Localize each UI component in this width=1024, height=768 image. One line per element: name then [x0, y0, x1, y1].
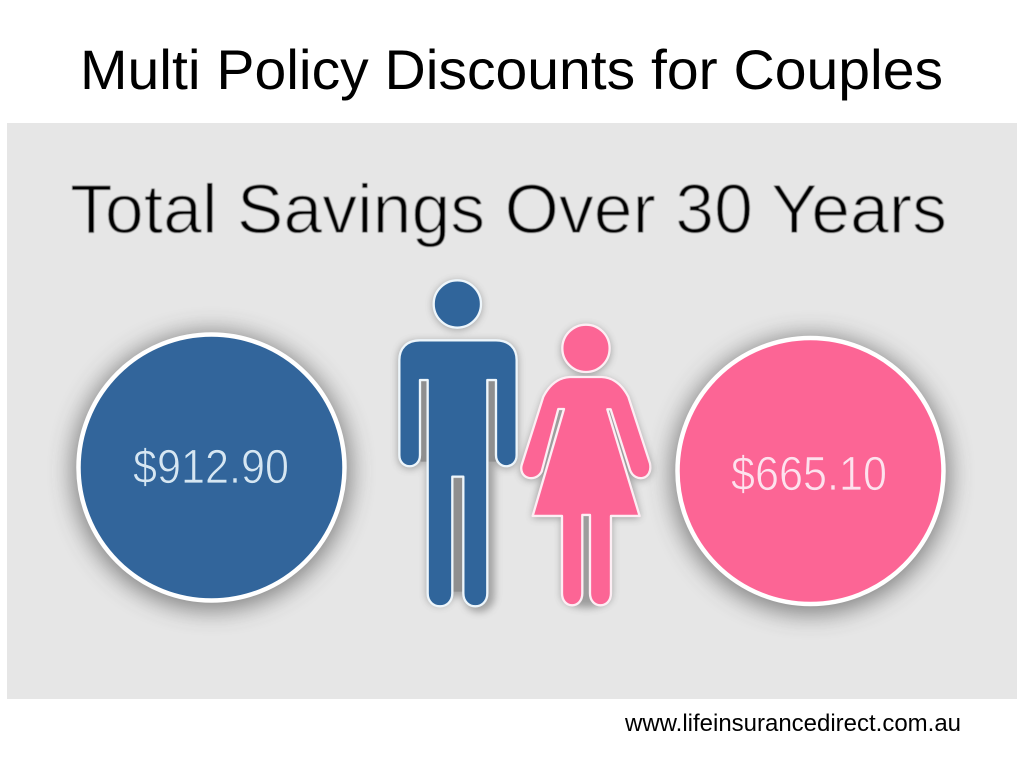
- heading: total savings: Total Savings Over 30 Years: [70, 170, 947, 248]
- shadow inside arm and leg gaps: [421, 382, 496, 592]
- icon: woman figure: [520, 325, 651, 608]
- blue savings circle: [72, 332, 350, 610]
- website footer: www.lifeinsurancedirect.com.au: [624, 710, 961, 737]
- title: Multi Policy Discounts for Couples: [80, 38, 943, 101]
- icon: man figure: [398, 280, 518, 612]
- amount: woman: $665.10: [731, 448, 887, 501]
- panel: savings graphic: [7, 123, 1017, 699]
- pink savings circle: [672, 336, 950, 614]
- amount: man: $912.90: [133, 441, 289, 494]
